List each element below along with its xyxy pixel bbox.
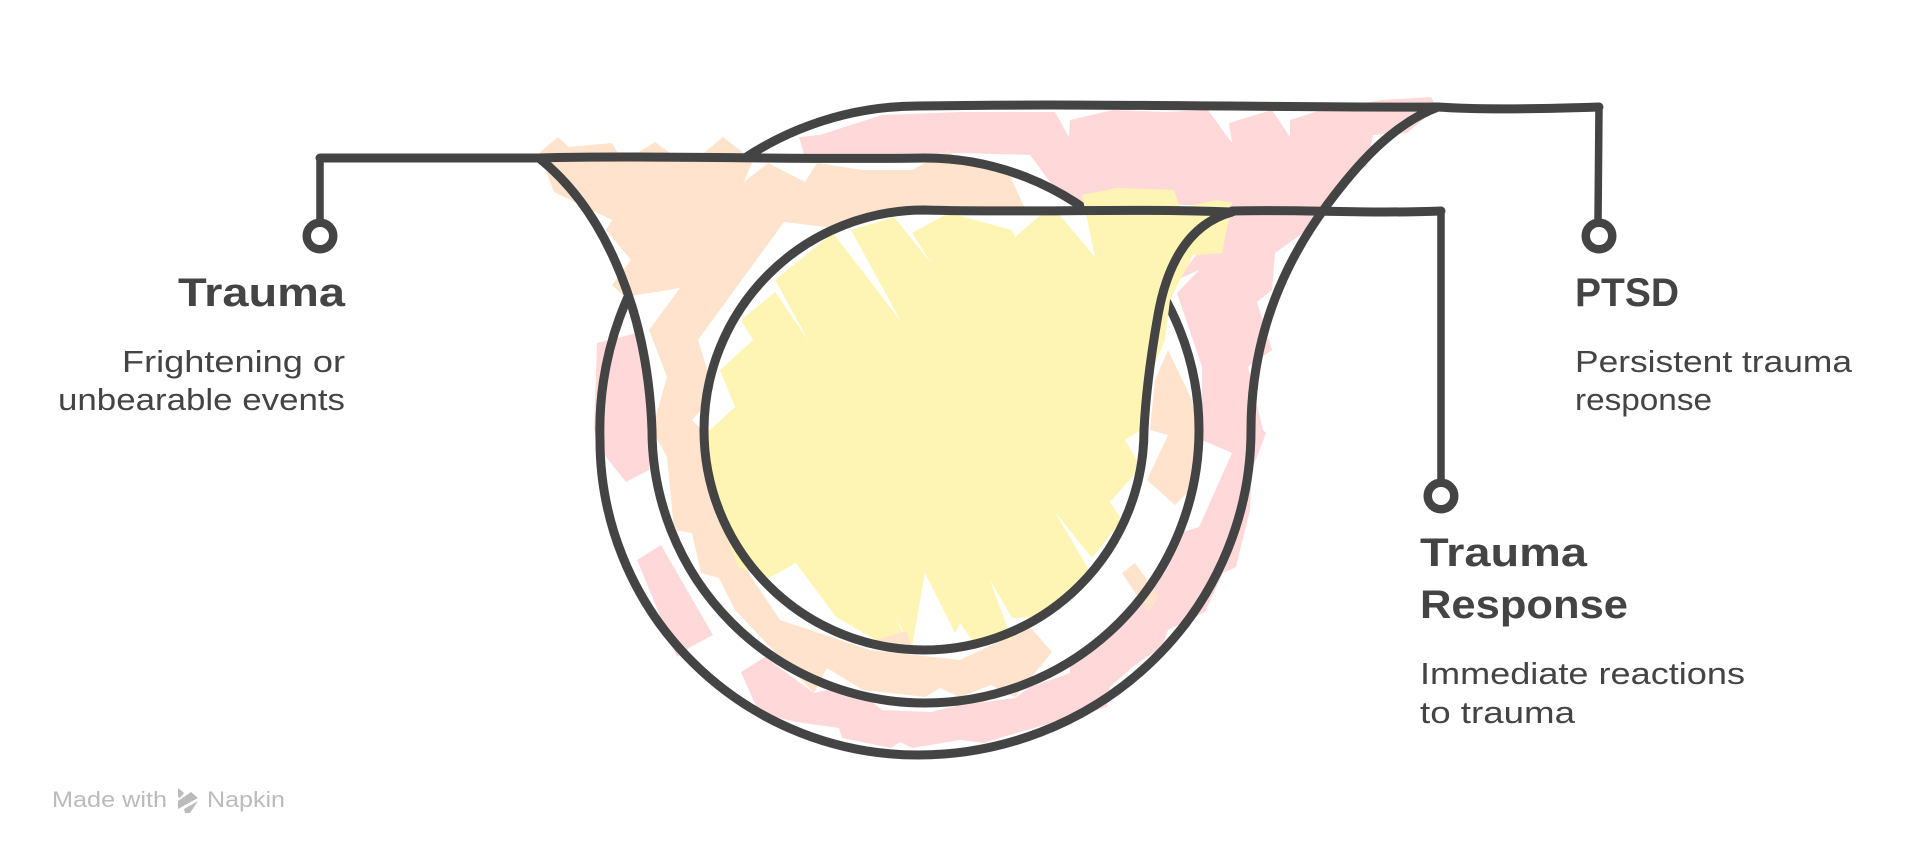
footer: Made with Napkin: Napkin	[207, 787, 285, 812]
layer: Inner trauma circle	[701, 188, 1232, 650]
label: PTSD: PTSD	[1575, 271, 1679, 315]
label: Trauma: Trauma	[178, 271, 346, 315]
label: Trauma Response: Immediate reactions	[1420, 656, 1745, 691]
label: Trauma: unbearable events	[58, 382, 345, 417]
label: Trauma Response: Response	[1420, 583, 1628, 627]
leader: PTSD	[1438, 107, 1612, 249]
leader: Trauma	[307, 158, 539, 249]
label: PTSD: Persistent trauma	[1575, 344, 1853, 379]
footer: Made with Napkin: Made with	[52, 787, 167, 812]
label: Trauma: Frightening or	[122, 344, 345, 379]
layer: PTSD outer teardrop	[594, 97, 1438, 755]
label: PTSD	[1575, 271, 1853, 417]
label: Trauma Response: Trauma	[1420, 531, 1588, 575]
leader: Trauma Response	[1232, 211, 1454, 509]
label: PTSD: response	[1575, 382, 1712, 417]
layer: Trauma response ring	[539, 137, 1199, 703]
label: Trauma Response	[1420, 531, 1745, 730]
footer: Made with Napkin	[52, 787, 285, 813]
label: Trauma	[58, 271, 346, 417]
label: Trauma Response: to trauma	[1420, 695, 1576, 730]
